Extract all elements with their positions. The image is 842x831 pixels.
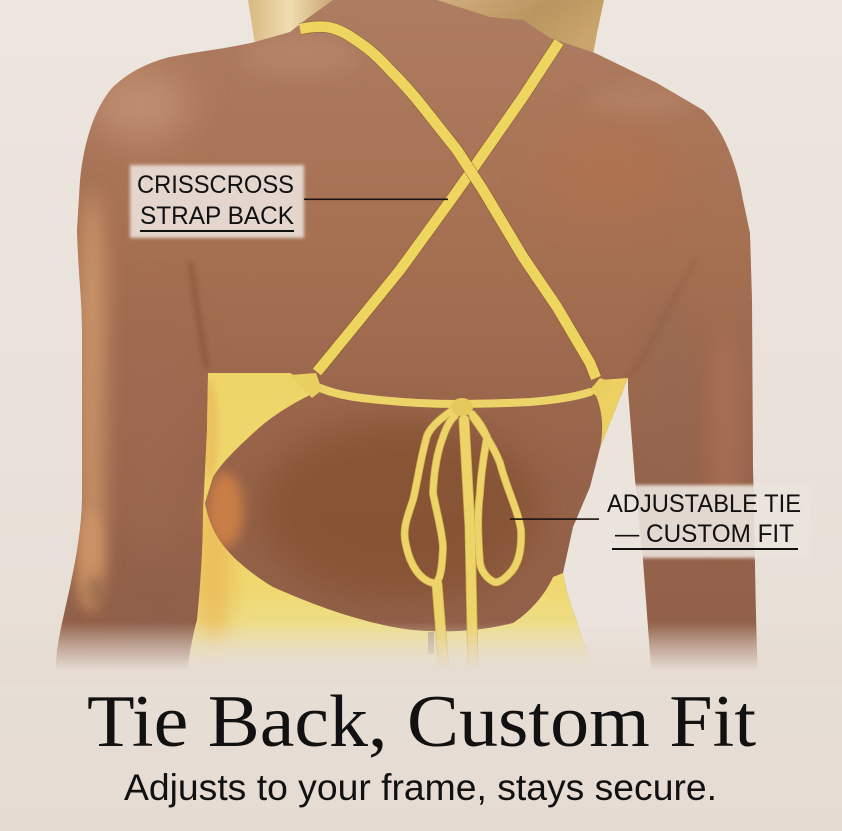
strap tabs bbox=[290, 373, 612, 400]
callout: crisscross strap back bbox=[130, 165, 448, 238]
callout: adjustable tie: — CUSTOM FIT bbox=[615, 520, 794, 548]
hair bbox=[248, 0, 604, 55]
callout: crisscross strap back: CRISSCROSS bbox=[137, 171, 294, 199]
gap between torso and right arm bbox=[563, 378, 652, 682]
callout: adjustable tie bbox=[510, 485, 810, 558]
subtitle: Adjusts to your frame, stays secure. bbox=[124, 767, 717, 808]
bottom fade bbox=[0, 622, 842, 670]
callout: crisscross strap back: STRAP BACK bbox=[140, 202, 294, 230]
title: Tie Back, Custom Fit bbox=[87, 681, 756, 763]
dress body bbox=[185, 373, 628, 682]
zipper bbox=[428, 632, 434, 654]
back and arms bbox=[55, 0, 758, 680]
knot bbox=[451, 398, 473, 416]
callout: adjustable tie: ADJUSTABLE TIE bbox=[607, 490, 801, 518]
arm shadow lines bbox=[191, 257, 697, 378]
crisscross straps bbox=[300, 27, 596, 378]
tie strap and loops bbox=[320, 388, 590, 672]
